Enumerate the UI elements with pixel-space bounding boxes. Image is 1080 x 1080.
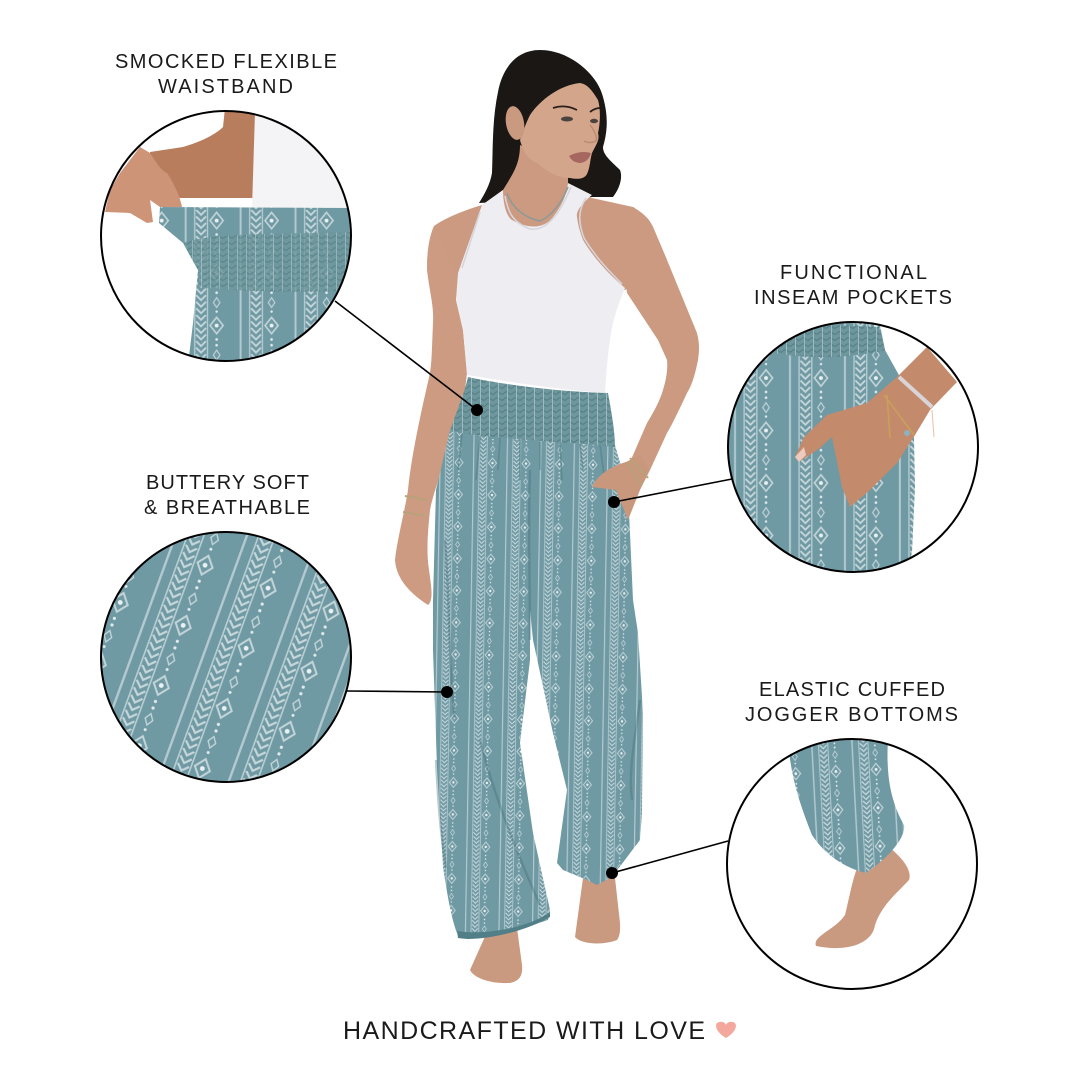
photo circle: pockets xyxy=(727,320,979,575)
face xyxy=(520,83,600,179)
necklace xyxy=(507,187,568,221)
neck and shoulders xyxy=(427,145,667,290)
leader line: cuffs xyxy=(606,841,728,879)
heading: waistband: WAISTBAND xyxy=(158,76,293,98)
photo circle: waistband xyxy=(100,108,352,365)
heading: fabric xyxy=(144,472,310,519)
pants folds xyxy=(436,470,640,905)
tank trim xyxy=(462,187,622,284)
panel: elastic cuffed jogger bottoms xyxy=(727,679,977,989)
smocked waistband xyxy=(450,377,615,447)
model figure xyxy=(395,50,699,983)
leader line: waistband xyxy=(335,301,483,416)
eyes, nose and lips xyxy=(553,106,600,163)
heading: cuffs xyxy=(745,679,958,726)
panel: functional inseam pockets xyxy=(727,262,979,575)
hand in pocket xyxy=(592,455,650,520)
gathers under waistband xyxy=(458,434,604,480)
ear xyxy=(503,105,527,141)
cuff shading xyxy=(457,912,550,939)
panel: buttery soft and breathable xyxy=(101,472,351,782)
hair xyxy=(479,50,621,203)
pants xyxy=(433,430,643,939)
heading: pockets: INSEAM POCKETS xyxy=(754,287,952,309)
leader line: pockets xyxy=(608,479,732,508)
far arm xyxy=(615,205,699,470)
feet xyxy=(470,928,522,983)
near arm xyxy=(395,226,467,605)
tank top xyxy=(456,183,625,393)
heading: pockets: FUNCTIONAL xyxy=(780,262,927,284)
icon: heart xyxy=(716,1022,736,1038)
photo circle: cuffs xyxy=(727,739,977,989)
photo circle: fabric xyxy=(101,532,351,782)
leader line: fabric xyxy=(347,686,453,698)
panel: smocked flexible waistband xyxy=(100,51,352,365)
heading: pockets xyxy=(754,262,952,309)
heading: cuffs: JOGGER BOTTOMS xyxy=(745,704,958,726)
bracelets xyxy=(403,458,648,516)
footer tagline: HANDCRAFTED WITH LOVE xyxy=(343,1017,705,1045)
heading: waistband: SMOCKED FLEXIBLE xyxy=(115,51,337,73)
heading: cuffs: ELASTIC CUFFED xyxy=(759,679,945,701)
heading: waistband xyxy=(115,51,337,98)
heading: fabric: BUTTERY SOFT xyxy=(146,472,309,494)
heading: fabric: & BREATHABLE xyxy=(144,497,310,519)
